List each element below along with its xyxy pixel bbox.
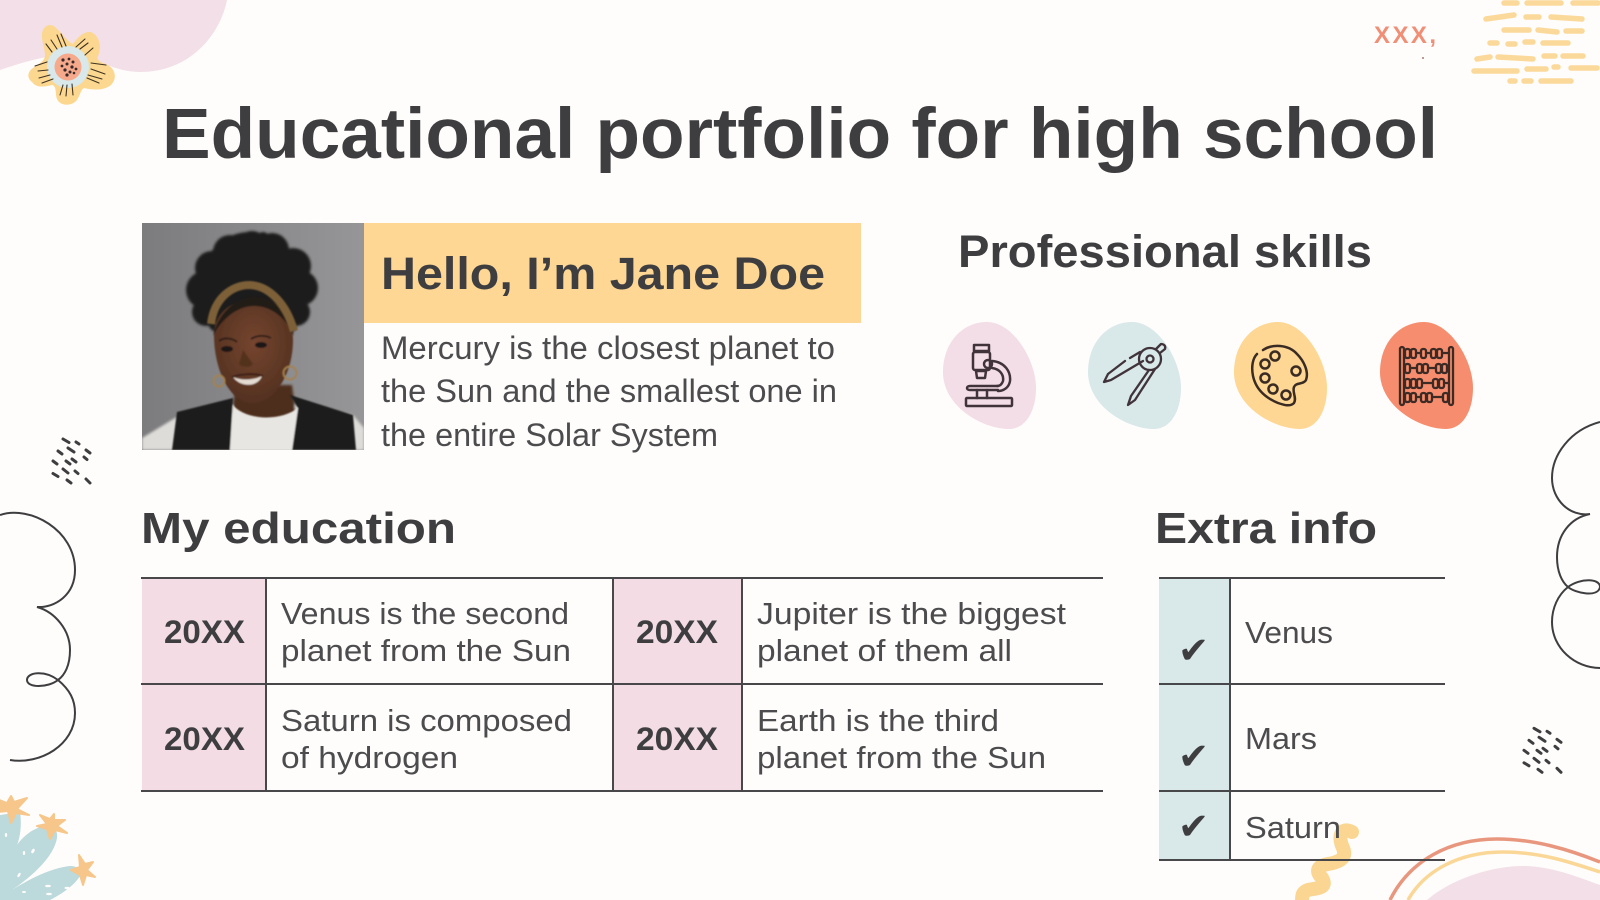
panel: name banner: [364, 223, 861, 323]
table: extra info: Saturn: [1245, 810, 1341, 845]
text block: introduction: the entire Solar System: [381, 417, 718, 453]
decoration: left swirl: [0, 513, 75, 761]
text block: introduction: the Sun and the smallest one in: [381, 373, 837, 409]
icon: palette: [1234, 322, 1327, 429]
decoration: right swirl: [1552, 422, 1600, 668]
decoration: left dots: [53, 439, 90, 483]
table: education: of hydrogen: [281, 740, 458, 775]
table: education: planet of them all: [757, 633, 1012, 668]
table: extra info: ✔: [1178, 805, 1209, 848]
decoration: right dots: [1524, 728, 1561, 772]
table: education: Saturn is composed: [281, 703, 572, 738]
heading: extra info: Extra info: [1155, 504, 1377, 553]
decoration: yellow dashes: [1474, 3, 1598, 81]
text block: introduction: Mercury is the closest planet to: [381, 330, 835, 366]
text block: introduction: [381, 330, 837, 453]
table: education: 20XX: [164, 721, 246, 757]
photo: portrait of Jane Doe: [142, 223, 364, 450]
table: education: Venus is the second: [281, 596, 569, 631]
decoration: yellow squiggle: [1302, 830, 1352, 900]
heading: my education: My education: [141, 504, 456, 553]
table: extra info: ✔: [1178, 735, 1209, 778]
table: education: 20XX: [636, 721, 719, 757]
table: extra info: Mars: [1245, 721, 1317, 756]
decoration: plant: [0, 796, 95, 900]
decoration: rainbow: [1390, 839, 1600, 900]
table: extra info: ✔: [1178, 629, 1209, 672]
table: education: Jupiter is the biggest: [757, 596, 1066, 631]
table: education: planet from the Sun: [281, 633, 571, 668]
icon: microscope: [943, 322, 1036, 429]
table: extra info: Venus: [1245, 615, 1333, 650]
table: education: [141, 578, 1103, 791]
table: education: 20XX: [636, 614, 719, 650]
decoration: pink corner blob: [0, 0, 227, 72]
table: education: Earth is the third: [757, 703, 999, 738]
table: education: planet from the Sun: [757, 740, 1046, 775]
icon: flower: [28, 25, 115, 105]
icon: abacus: [1380, 322, 1473, 429]
table: extra info: [1159, 578, 1445, 860]
icon: compass: [1088, 322, 1181, 429]
table: education: 20XX: [164, 614, 246, 650]
title: Educational portfolio for high school: [162, 95, 1438, 174]
panel: name banner: Hello, I’m Jane Doe: [381, 248, 825, 299]
decoration: XXX mark: XXX,: [1374, 22, 1436, 49]
heading: professional skills: Professional skills: [958, 226, 1372, 277]
